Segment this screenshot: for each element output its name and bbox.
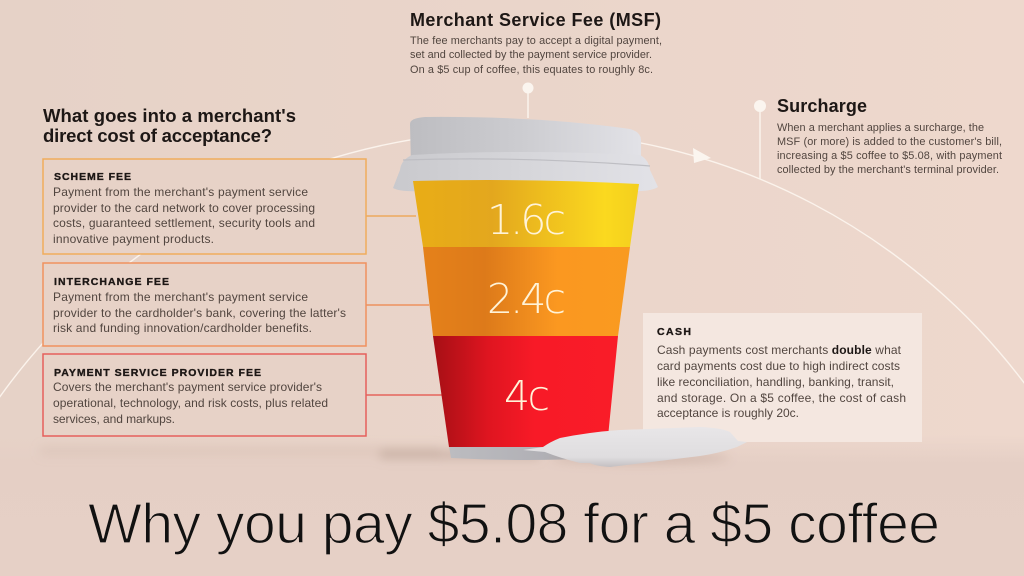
curved payment arc with arrow [0, 131, 1024, 398]
MSF text block: On a $5 cup of coffee, this equates to roughly 8c. [410, 64, 653, 76]
panel: interchange fee [43, 263, 366, 346]
panel: payment service provider fee: Covers the merchant's payment service provider's [53, 380, 322, 394]
Surcharge text block: When a merchant applies a surcharge, the [777, 122, 984, 134]
panel: interchange fee: INTERCHANGE FEE [54, 276, 169, 288]
panel: cash: card payments cost due to high indirect costs [657, 359, 900, 373]
MSF text block [410, 10, 662, 76]
coffee cup [393, 117, 658, 460]
cup yellow band: 1.6c: 1.6c [487, 196, 566, 244]
Surcharge pointer line [754, 100, 766, 179]
panel: interchange fee: Payment from the merchant's payment service [53, 290, 308, 304]
cup red band: 4c [433, 336, 618, 447]
panel: interchange fee: provider to the cardholder's bank, covering the latter's [53, 306, 346, 320]
main title: Why you pay $5.08 for a $5 coffee [88, 492, 940, 556]
cup yellow band: 1.6c [413, 180, 639, 247]
panel: scheme fee: innovative payment products. [53, 232, 214, 246]
cup orange band: 2.4c: 2.4c [487, 275, 566, 323]
cup base [449, 446, 607, 460]
panel: interchange fee: risk and funding innovation/cardholder benefits. [53, 321, 312, 335]
panel: scheme fee: provider to the card network to cover processing [53, 201, 315, 215]
cup orange band: 2.4c [423, 247, 630, 336]
cup lid [393, 117, 658, 191]
Surcharge text block: collected by the merchant's terminal provider. [777, 164, 999, 176]
panel: scheme fee [43, 159, 366, 254]
panel: cash: acceptance is roughly 20c. [657, 406, 799, 420]
panel: scheme fee: costs, guaranteed settlement, security tools and [53, 216, 315, 230]
panel: payment service provider fee [43, 354, 366, 436]
cup red band: 4c: 4c [504, 372, 550, 420]
panel: payment service provider fee: PAYMENT SERVICE PROVIDER FEE [54, 367, 261, 379]
Surcharge text block: Surcharge [777, 96, 867, 116]
panel: cash: CASH [657, 326, 691, 338]
Surcharge text block: MSF (or more) is added to the customer's bill, [777, 136, 1002, 148]
Surcharge text block: increasing a $5 coffee to $5.08, with payment [777, 150, 1002, 162]
floor shadow [40, 446, 540, 459]
left heading: direct cost of acceptance? [43, 125, 272, 146]
panel: cash: and storage. On a $5 coffee, the cost of cash [657, 391, 906, 405]
panel: scheme fee: Payment from the merchant's payment service [53, 185, 308, 199]
panel: payment service provider fee: operational, technology, and risk costs, plus related [53, 396, 328, 410]
MSF text block: The fee merchants pay to accept a digital payment, [410, 35, 662, 47]
panel: cash [643, 313, 922, 442]
left heading: What goes into a merchant's [43, 105, 296, 126]
MSF text block: set and collected by the payment service provider. [410, 49, 652, 61]
connector lines from fee boxes to cup [366, 216, 442, 395]
panel: cash: Cash payments cost merchants double what [657, 343, 902, 357]
Surcharge text block [777, 96, 1002, 176]
MSF text block: Merchant Service Fee (MSF) [410, 10, 661, 30]
sugar sachet [523, 427, 747, 467]
left heading [43, 105, 296, 146]
panel: cash: like reconciliation, handling, banking, transit, [657, 375, 894, 389]
panel: payment service provider fee: services, and markups. [53, 412, 175, 426]
MSF pointer line [522, 82, 534, 118]
panel: scheme fee: SCHEME FEE [54, 171, 131, 183]
